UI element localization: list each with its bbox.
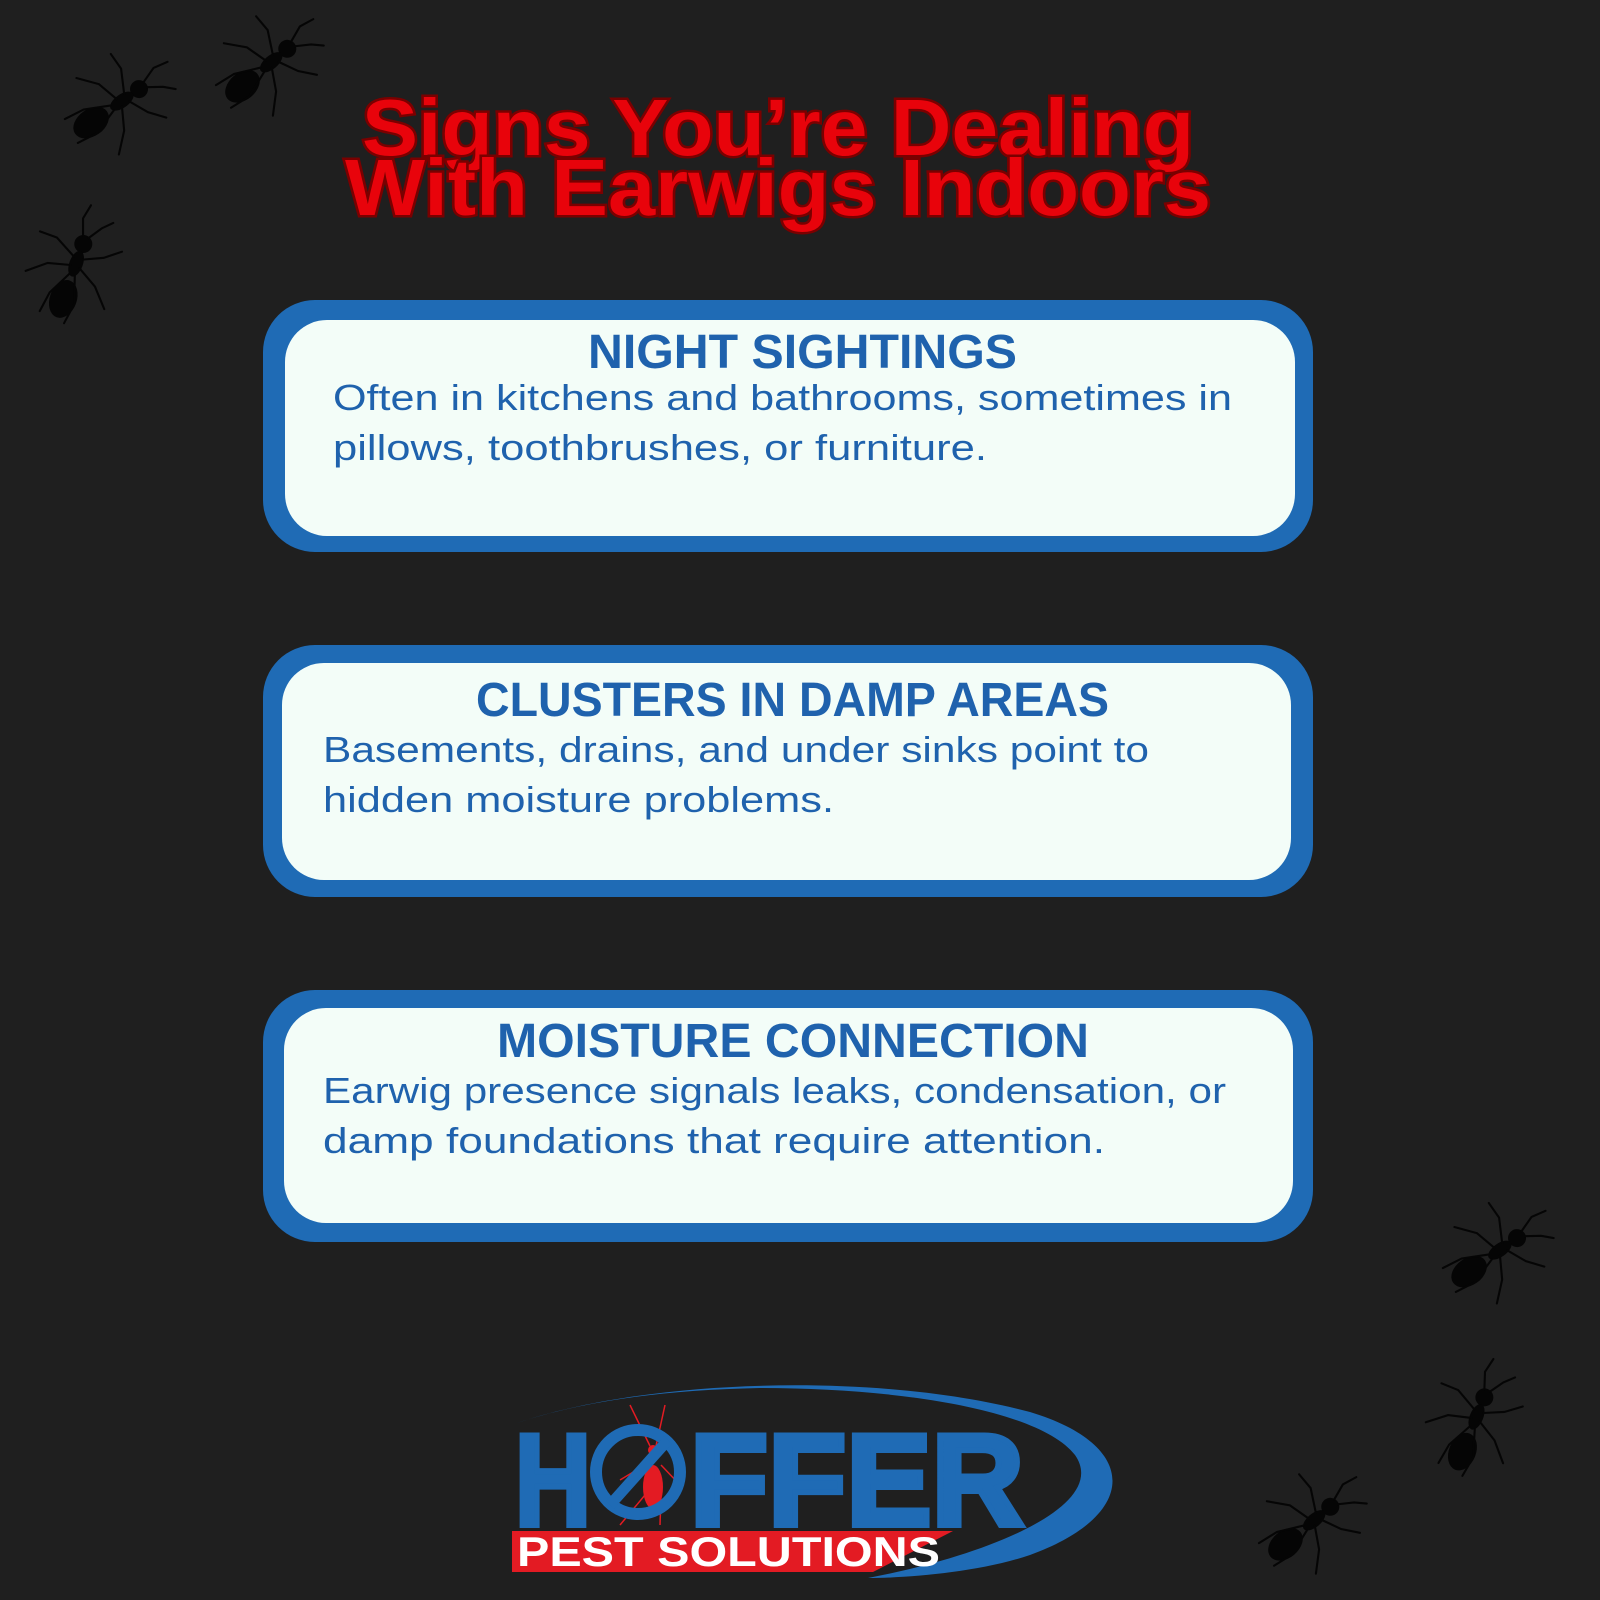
text: clusters body — [323, 729, 1149, 820]
logo: hoffer pest solutions: H — [515, 1407, 591, 1553]
text: clusters body: Basements, drains, and under sinks point to — [323, 729, 1149, 770]
title — [345, 83, 1211, 232]
ant: top left 1 — [47, 30, 195, 170]
logo: hoffer pest solutions: FFER — [690, 1407, 1024, 1553]
ant: top left 2 — [196, 0, 344, 133]
text: night sightings body: pillows, toothbrushes, or furniture. — [333, 427, 987, 468]
title: Signs You’re Dealing — [362, 83, 1194, 172]
ant: bottom right 1 — [1425, 1179, 1573, 1319]
panel: night sightings — [263, 300, 1313, 552]
panel: clusters in damp areas — [263, 645, 1313, 897]
panel: moisture connection — [263, 990, 1313, 1242]
text: clusters body: hidden moisture problems. — [323, 779, 834, 820]
ant: bottom right 3 — [1239, 1447, 1387, 1591]
logo: hoffer pest solutions — [512, 1385, 1112, 1578]
text: night sightings body: Often in kitchens and bathrooms, sometimes in — [333, 377, 1232, 418]
ant: left 3 — [13, 192, 136, 334]
text: night sightings body — [333, 377, 1232, 468]
text: moisture body: Earwig presence signals leaks, condensation, or — [323, 1070, 1226, 1111]
heading: night sightings: NIGHT SIGHTINGS — [588, 326, 1017, 379]
ant: bottom right 2 — [1412, 1344, 1538, 1488]
logo: hoffer pest solutions: PEST SOLUTIONS — [517, 1528, 940, 1575]
title: With Earwigs Indoors — [345, 143, 1211, 232]
heading: moisture: MOISTURE CONNECTION — [497, 1015, 1089, 1068]
heading: clusters: CLUSTERS IN DAMP AREAS — [476, 674, 1109, 727]
text: moisture body — [323, 1070, 1226, 1161]
text: moisture body: damp foundations that require attention. — [323, 1120, 1105, 1161]
icon: no-bug — [596, 1405, 680, 1525]
